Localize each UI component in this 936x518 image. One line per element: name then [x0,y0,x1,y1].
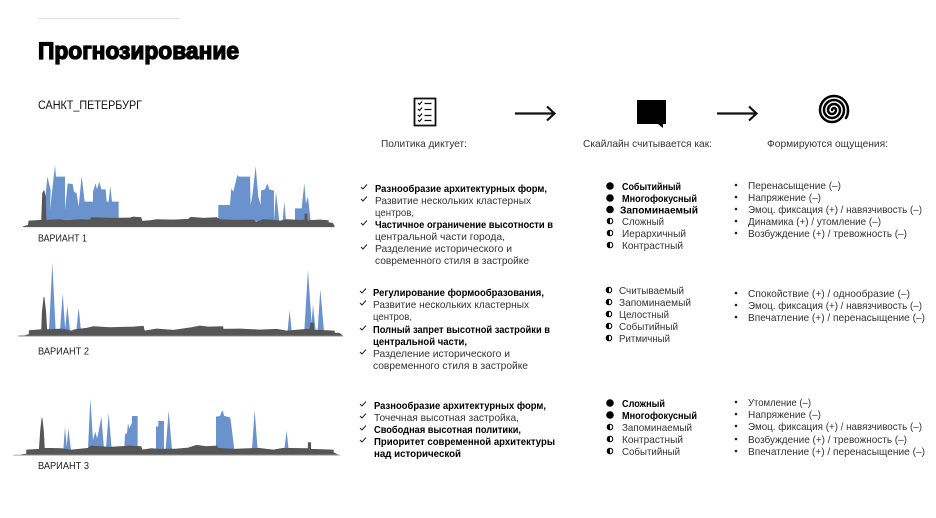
feelings list: variant 3: Эмоц. фиксация (+) / навязчивость (–) [748,421,922,433]
feelings list: variant 2 [735,288,925,324]
policy list: variant 1: Разнообразие архитектурных форм, [375,183,547,195]
reading list: variant 2 [606,285,691,345]
reading list: variant 2: Ритмичный [619,333,670,345]
policy list: variant 1 [361,183,553,267]
policy list: variant 3 [360,400,555,460]
reading list: variant 3: Многофокусный [622,410,697,422]
policy list: variant 1: центральной части города, [375,231,505,243]
column heading: reading: Скайлайн считывается как: [583,138,712,150]
icon: speech bubble [637,100,666,128]
feelings list: variant 1 [735,180,922,240]
policy list: variant 1: современного стиля в застройке [375,255,529,267]
policy list: variant 3: Приоритет современной архитектуры [374,436,555,448]
policy list: variant 1: Развитие нескольких кластерных [375,195,532,207]
city label: САНКТ_ПЕТЕРБУРГ [38,100,143,112]
policy list: variant 1: Разделение исторического и [375,243,512,255]
feelings list: variant 1: Возбуждение (+) / тревожность (–) [748,228,907,240]
reading list: variant 2: Событийный [619,321,678,333]
reading list: variant 1: Сложный [622,216,664,228]
reading list: variant 3: Контрастный [622,434,683,446]
reading list: variant 2: Запоминаемый [619,297,691,309]
arrow: reading to feelings [717,106,756,120]
policy list: variant 2: Развитие нескольких кластерных [373,299,530,311]
reading list: variant 1: Иерархичный [622,228,686,240]
reading list: variant 2: Считываемый [619,285,684,297]
reading list: variant 3: Событийный [622,446,680,458]
label: variant 1: ВАРИАНТ 1 [38,234,87,244]
skyline: variant 2 [18,262,343,336]
policy list: variant 2 [360,287,550,372]
feelings list: variant 2: Эмоц. фиксация (+) / навязчивость (–) [748,300,922,312]
feelings list: variant 3: Утомление (–) [748,397,811,409]
arrow: policy to reading [515,106,554,120]
reading list: variant 1 [606,181,698,252]
reading list: variant 3: Запоминаемый [622,422,692,434]
reading list: variant 1: Событийный [622,181,681,193]
policy list: variant 1: Частичное ограничение высотности в [375,219,553,231]
policy list: variant 3: Разнообразие архитектурных форм, [374,400,546,412]
feelings list: variant 3: Возбуждение (+) / тревожность (–) [748,434,907,446]
feelings list: variant 1: Эмоц. фиксация (+) / навязчивость (–) [748,204,922,216]
reading list: variant 1: Многофокусный [622,193,697,205]
column heading: feelings: Формируются ощущения: [767,138,888,150]
feelings list: variant 3: Напряжение (–) [748,409,821,421]
policy list: variant 2: Полный запрет высотной застройки в [373,324,550,336]
reading list: variant 3: Сложный [622,398,665,410]
policy list: variant 2: центров, [373,311,412,323]
feelings list: variant 1: Напряжение (–) [748,192,821,204]
policy list: variant 2: центральной части, [373,336,467,348]
policy list: variant 3: Точечная высотная застройка, [374,412,519,424]
skyline: variant 3 [13,398,340,456]
policy list: variant 3: над исторической [374,448,461,460]
policy list: variant 3: Свободная высотная политики, [374,424,521,436]
reading list: variant 2: Целостный [619,309,669,321]
feelings list: variant 2: Впечатление (+) / перенасыщение (–) [748,312,925,324]
feelings list: variant 1: Динамика (+) / утомление (–) [748,216,881,228]
skyline: variant 1 [23,165,334,227]
feelings list: variant 1: Перенасыщение (–) [748,180,841,192]
column heading: policy: Политика диктует: [381,138,467,150]
policy list: variant 2: Разделение исторического и [373,348,510,360]
reading list: variant 3 [606,398,697,458]
label: variant 3: ВАРИАНТ 3 [38,461,89,472]
feelings list: variant 3: Впечатление (+) / перенасыщение (–) [748,446,925,458]
title: Прогнозирование [38,38,239,65]
reading list: variant 1: Запоминаемый [620,204,698,216]
icon: checklist [414,98,436,126]
icon: spiral [820,96,848,122]
policy list: variant 2: Регулирование формообразования, [373,287,544,299]
feelings list: variant 2: Спокойствие (+) / однообразие (–) [748,288,910,300]
policy list: variant 1: центров, [375,207,414,219]
reading list: variant 1: Контрастный [622,240,683,252]
feelings list: variant 3 [735,397,925,458]
label: variant 2: ВАРИАНТ 2 [38,346,89,358]
policy list: variant 2: современного стиля в застройке [373,360,528,372]
